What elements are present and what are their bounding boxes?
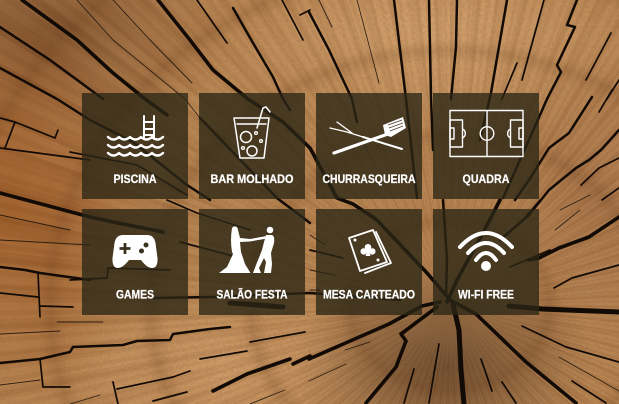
panel: wi-fi free — [433, 209, 539, 315]
icon: wi-fi signal — [460, 233, 512, 271]
label: PISCINA — [114, 172, 157, 186]
panel: games — [82, 209, 188, 315]
icon: football field — [450, 110, 523, 156]
icon: cocktail glass — [234, 107, 270, 158]
icon: playing cards — [349, 230, 391, 273]
icon: pool ladder and waves — [108, 116, 163, 156]
icon: crossed fork and spatula — [330, 117, 406, 153]
icon: game controller — [112, 235, 158, 268]
panel: churrasqueira — [316, 93, 422, 199]
panel: salão festa — [199, 209, 305, 315]
panel: piscina — [82, 93, 188, 199]
label: BAR MOLHADO — [210, 172, 294, 186]
label: GAMES — [116, 288, 154, 302]
label: QUADRA — [462, 172, 510, 186]
label: WI-FI FREE — [458, 288, 514, 302]
panel: bar molhado — [199, 93, 305, 199]
panel: quadra — [433, 93, 539, 199]
label: SALÃO FESTA — [216, 286, 288, 302]
icon: dancing bride and groom — [219, 226, 274, 273]
label: MESA CARTEADO — [323, 288, 415, 302]
panel: mesa carteado — [316, 209, 422, 315]
label: CHURRASQUEIRA — [322, 172, 416, 186]
